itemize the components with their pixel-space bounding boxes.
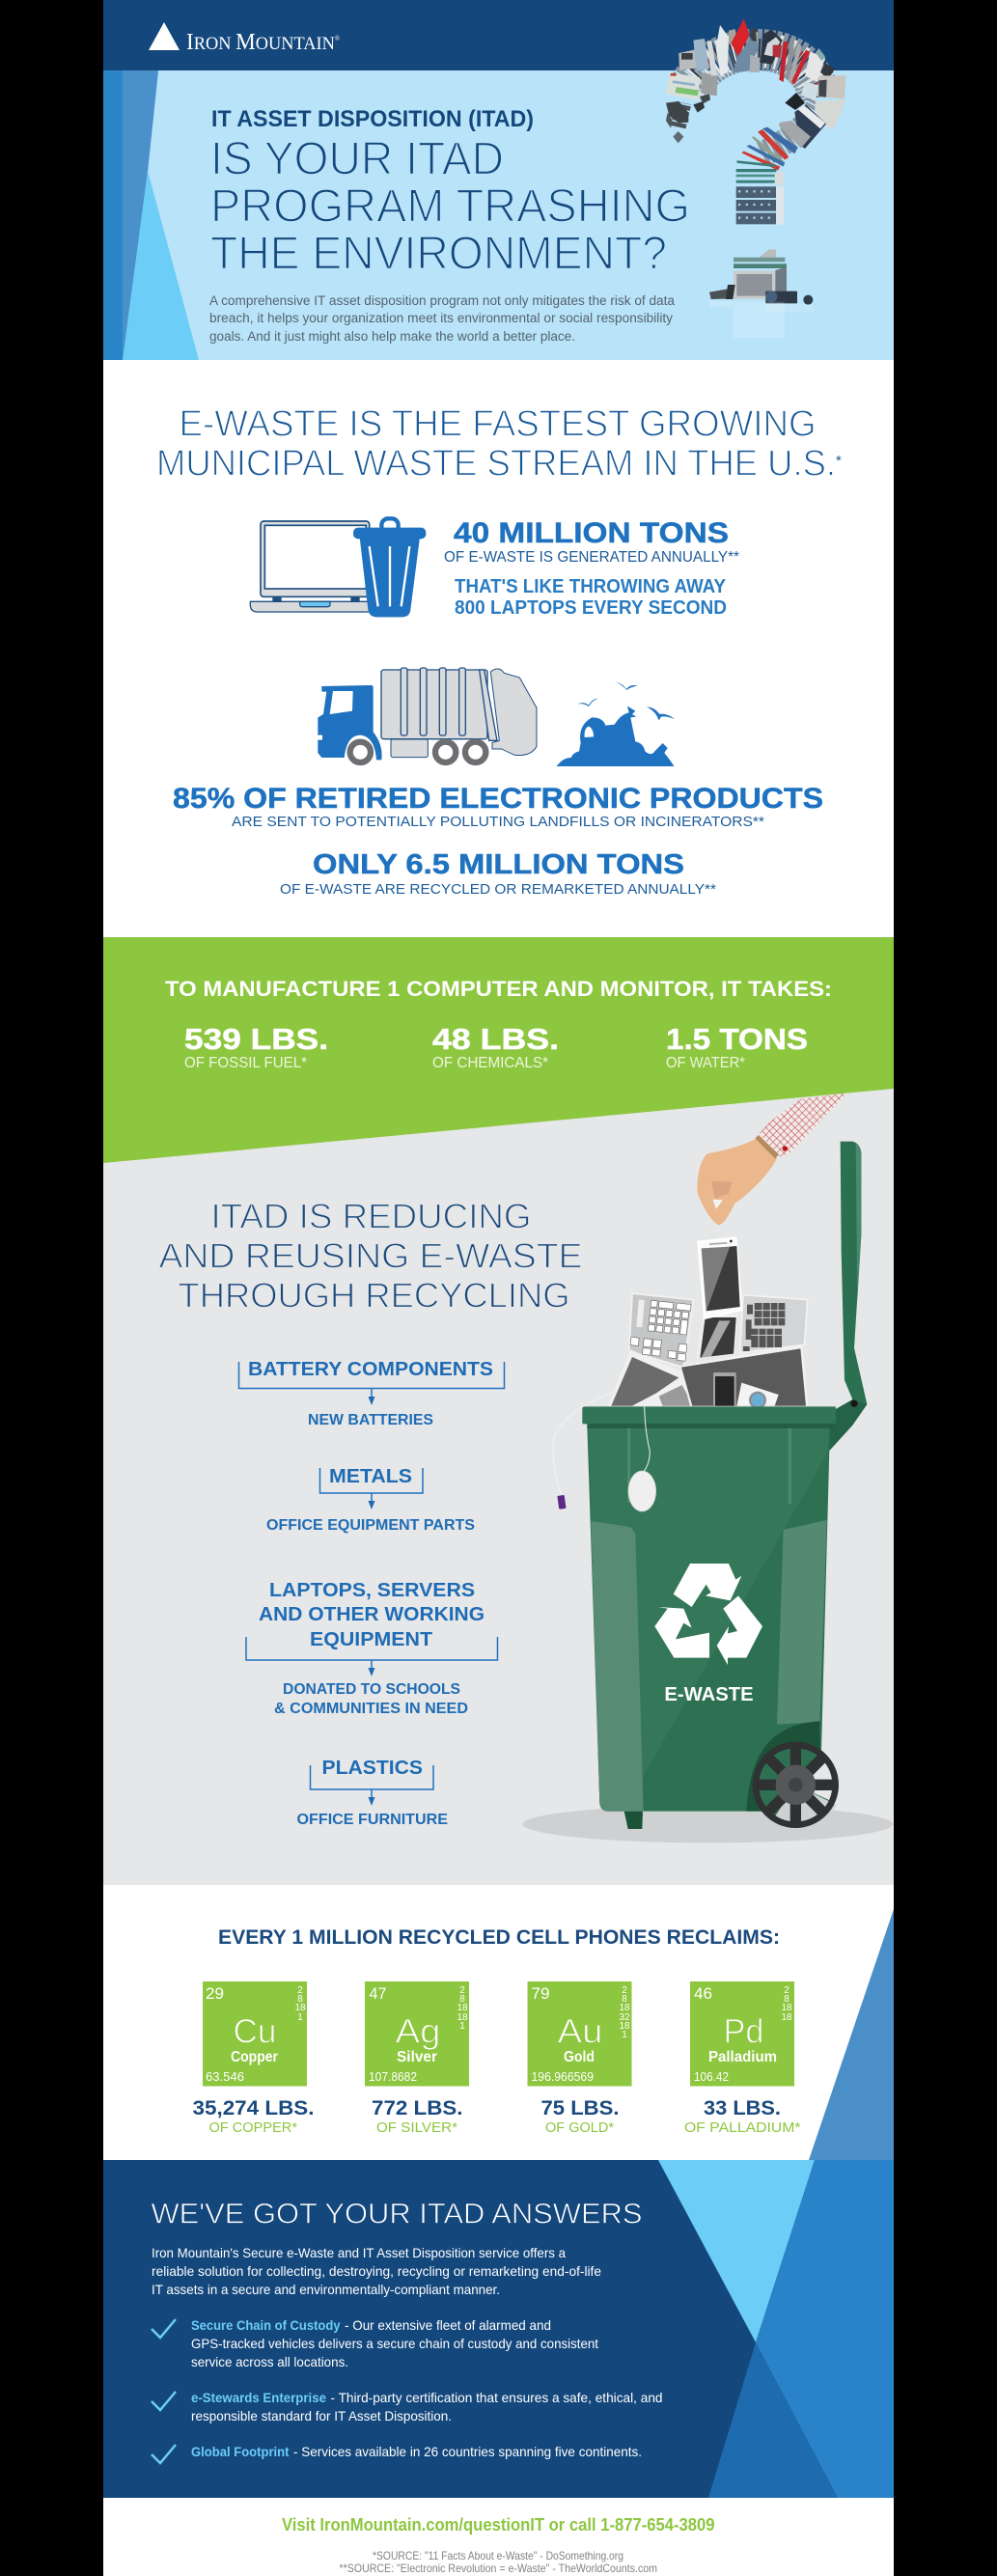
- sources: *SOURCE: "11 Facts About e-Waste" - DoSomething.org: [373, 2549, 623, 2562]
- tile: palladium: 18: [781, 2012, 792, 2023]
- e-waste heading: MUNICIPAL WASTE STREAM IN THE U.S.: [156, 444, 836, 485]
- tile: gold: Au: [558, 2013, 602, 2050]
- heading: ITAD is reducing: THROUGH RECYCLING: [178, 1276, 569, 1315]
- stat: gold: 75 LBS.: [540, 2097, 620, 2119]
- icon: tablet behind phone: [697, 1315, 737, 1358]
- panel: ITAD answers: [103, 2160, 894, 2498]
- panel: e-waste statistics: [103, 360, 894, 937]
- tile: silver: 8: [459, 1994, 465, 2005]
- callout: 800 laptops every second: [455, 576, 727, 619]
- stat: copper: OF COPPER*: [208, 2119, 297, 2136]
- stat: palladium: [684, 2097, 801, 2136]
- recycling symbol: [654, 1564, 762, 1665]
- tile: palladium: 2: [784, 1985, 789, 1996]
- tile: copper: 29: [206, 1984, 224, 2003]
- answers intro paragraph: Iron Mountain's Secure e-Waste and IT Asset Disposition service offers a: [152, 2245, 566, 2260]
- tile: silver: 18: [457, 2003, 468, 2013]
- stat: 40 million tons: OF E-WASTE IS GENERATED ANNUALLY**: [444, 549, 739, 566]
- stat: silver: OF SILVER*: [376, 2119, 457, 2136]
- hero eyebrow heading: IT ASSET DISPOSITION (ITAD): [211, 106, 534, 132]
- flow: battery components: NEW BATTERIES: [308, 1412, 433, 1428]
- illustration: hand and discarded devices: [608, 1094, 846, 1409]
- stat: water: [666, 1022, 808, 1071]
- bullet: secure chain of custody: GPS-tracked vehicles delivers a secure chain of custody and consistent: [191, 2336, 598, 2351]
- answers heading: WE'VE GOT YOUR ITAD ANSWERS: [151, 2199, 643, 2230]
- tile: palladium: 8: [784, 1994, 789, 2005]
- bin lid and hinge: [829, 1142, 867, 1451]
- stat: copper: 35,274 LBS.: [193, 2097, 315, 2119]
- hero paragraph: goals. And it just might also help make the world a better place.: [209, 329, 575, 344]
- heading: ITAD is reducing: ITAD IS REDUCING: [210, 1197, 531, 1235]
- tile: gold: 79: [531, 1984, 550, 2003]
- panel: recycled phones: [103, 1885, 894, 2160]
- tile: palladium: 18: [781, 2003, 792, 2013]
- flow: battery components: BATTERY COMPONENTS: [248, 1359, 493, 1380]
- tile: silver: Ag: [396, 2013, 440, 2050]
- call to action: Visit IronMountain.com/questionIT or call 1-877-654-3809: [282, 2515, 714, 2534]
- bullet: secure chain of custody: - Our extensive fleet of alarmed and: [345, 2317, 551, 2333]
- bullet: e-Stewards Enterprise: responsible standard for IT Asset Disposition.: [191, 2408, 452, 2424]
- stat: silver: 772 LBS.: [372, 2097, 463, 2119]
- icon: check 1: [152, 2319, 176, 2338]
- stat: fossil fuel: OF FOSSIL FUEL*: [184, 1055, 307, 1071]
- stat: fossil fuel: 539 LBS.: [184, 1022, 328, 1056]
- stat: 85% of retired electronic products: 85% OF RETIRED ELECTRONIC PRODUCTS: [173, 783, 823, 815]
- stat: chemicals: [432, 1022, 559, 1071]
- tile: gold: 32: [619, 2012, 630, 2023]
- panel: gray recycling background: [103, 1062, 894, 1885]
- flow: laptops and servers: [246, 1580, 498, 1717]
- tile: palladium: [690, 1981, 794, 2087]
- flow: plastics: [297, 1758, 448, 1828]
- wheel: [756, 1745, 844, 1828]
- icon: laptop: [250, 521, 370, 612]
- stat: chemicals: 48 LBS.: [432, 1022, 559, 1056]
- manufacture heading: TO MANUFACTURE 1 COMPUTER AND MONITOR, IT TAKES:: [165, 977, 832, 1001]
- panel: footer: [103, 2498, 894, 2576]
- tile: copper: 2: [297, 1985, 303, 1996]
- icon: hand: [697, 1135, 788, 1225]
- tile: copper: 63.546: [206, 2069, 244, 2084]
- flow: laptops and servers: & COMMUNITIES IN NEED: [274, 1701, 468, 1717]
- tile: copper: [203, 1981, 307, 2087]
- stat: palladium: 33 LBS.: [704, 2097, 781, 2119]
- stat: only 6.5 million tons: [280, 849, 716, 898]
- logo: Iron Mountain: [149, 22, 341, 55]
- tile: copper: Cu: [234, 2013, 276, 2050]
- hero paragraph: A comprehensive IT asset disposition program not only mitigates the risk of data: [209, 293, 675, 308]
- icon: landfill with birds: [557, 682, 675, 766]
- tile: gold: 18: [619, 2021, 630, 2032]
- icon: phone: [698, 1237, 741, 1318]
- bullet: secure chain of custody: Secure Chain of Custody: [191, 2317, 341, 2333]
- stat: silver: [372, 2097, 463, 2136]
- hero title: THE ENVIRONMENT?: [210, 228, 667, 280]
- stat: water: 1.5 TONS: [666, 1022, 808, 1056]
- icon: e-waste bin: [523, 1142, 893, 1842]
- answers intro paragraph: IT assets in a secure and environmentally-compliant manner.: [152, 2282, 500, 2297]
- logo: Iron Mountain: ®: [335, 35, 341, 42]
- sources: **SOURCE: "Electronic Revolution = e-Waste" - TheWorldCounts.com: [340, 2562, 657, 2575]
- stat: only 6.5 million tons: OF E-WASTE ARE RECYCLED OR REMARKETED ANNUALLY**: [280, 881, 716, 898]
- icon: front tablets and camera: [608, 1344, 808, 1409]
- tile: silver: Silver: [397, 2049, 437, 2065]
- heading: ITAD is reducing: AND REUSING E-WASTE: [158, 1235, 583, 1276]
- answers intro paragraph: reliable solution for collecting, destroying, recycling or remarketing end-of-life: [152, 2263, 601, 2279]
- stat: 40 million tons: [444, 517, 739, 566]
- tile: palladium: 46: [694, 1984, 712, 2003]
- bullet: e-Stewards Enterprise: - Third-party certification that ensures a safe, ethical, and: [330, 2390, 662, 2405]
- tile: palladium: Pd: [724, 2013, 764, 2050]
- hero paragraph: [209, 293, 675, 344]
- hero title: IS YOUR ITAD: [210, 133, 504, 185]
- stat: chemicals: OF CHEMICALS*: [432, 1055, 548, 1071]
- stat: gold: [540, 2097, 620, 2136]
- stat: water: OF WATER*: [666, 1055, 745, 1071]
- panel: manufacture resources: [103, 937, 894, 1163]
- stat: 85% of retired electronic products: ARE SENT TO POTENTIALLY POLLUTING LANDFILLS OR INCINERATORS**: [232, 814, 764, 830]
- answers intro paragraph: [152, 2245, 601, 2297]
- tile: copper: 18: [294, 2003, 306, 2013]
- tile: copper: Copper: [231, 2049, 278, 2065]
- icon: shirt sleeve: [760, 1094, 846, 1156]
- tile: silver: 107.8682: [369, 2069, 417, 2084]
- flow: metals: [266, 1466, 475, 1534]
- tile: gold: 2: [622, 1985, 627, 1996]
- tile: copper: 1: [297, 2012, 303, 2023]
- flow: laptops and servers: EQUIPMENT: [310, 1629, 432, 1650]
- icon: keyboard right: [740, 1295, 808, 1353]
- hero paragraph: breach, it helps your organization meet its environmental or social responsibility: [209, 311, 673, 325]
- bullet: secure chain of custody: [191, 2317, 598, 2369]
- icon: question mark of IT hardware: [666, 18, 846, 338]
- sources: [340, 2549, 657, 2575]
- flow: plastics: OFFICE FURNITURE: [297, 1812, 448, 1828]
- recycled phones heading: EVERY 1 MILLION RECYCLED CELL PHONES RECLAIMS:: [218, 1926, 780, 1949]
- tile: palladium: Palladium: [708, 2049, 777, 2065]
- mouse and cable: [553, 1392, 656, 1511]
- icon: keyboard left: [629, 1293, 693, 1368]
- tile: gold: 196.966569: [531, 2069, 594, 2084]
- icon: trash can: [353, 518, 426, 617]
- tile: palladium: 106.42: [694, 2069, 729, 2084]
- flow: metals: METALS: [329, 1466, 412, 1487]
- e-waste heading: *: [836, 453, 842, 469]
- flow: plastics: PLASTICS: [322, 1758, 423, 1779]
- icon: check 2: [152, 2392, 176, 2410]
- bullet: secure chain of custody: service across all locations.: [191, 2354, 348, 2369]
- tile: gold: 1: [622, 2030, 627, 2040]
- stat: gold: OF GOLD*: [545, 2119, 614, 2136]
- e-waste heading: E-WASTE IS THE FASTEST GROWING: [180, 403, 817, 444]
- tile: gold: 18: [619, 2003, 630, 2013]
- callout: 800 laptops every second: THAT'S LIKE THROWING AWAY: [455, 576, 727, 597]
- bin label: E-WASTE: [664, 1684, 754, 1705]
- hero title: [210, 133, 690, 280]
- tile: gold: Gold: [564, 2049, 595, 2065]
- flow: laptops and servers: AND OTHER WORKING: [259, 1604, 485, 1625]
- icon: check 3: [152, 2445, 176, 2463]
- tile: copper: 8: [297, 1994, 303, 2005]
- bullet: e-Stewards Enterprise: e-Stewards Enterprise: [191, 2390, 326, 2405]
- icon: garbage truck: [318, 668, 537, 762]
- stat: fossil fuel: [184, 1022, 328, 1071]
- bullet: e-Stewards Enterprise: [191, 2390, 662, 2424]
- e-waste heading: [156, 403, 842, 485]
- flow: battery components: [239, 1359, 504, 1428]
- tile: silver: 1: [459, 2021, 465, 2032]
- logo: Iron Mountain: IRON MOUNTAIN: [186, 30, 338, 55]
- tile: silver: 47: [369, 1984, 386, 2003]
- tile: gold: 8: [622, 1994, 627, 2005]
- flow: laptops and servers: DONATED TO SCHOOLS: [283, 1681, 460, 1698]
- tile: silver: [365, 1981, 469, 2087]
- stat: 40 million tons: 40 MILLION TONS: [454, 517, 729, 549]
- bullet: global footprint: - Services available in 26 countries spanning five continents.: [293, 2444, 642, 2459]
- bin shadow: [523, 1806, 893, 1842]
- stat: palladium: OF PALLADIUM*: [684, 2119, 801, 2136]
- callout: 800 laptops every second: 800 LAPTOPS EVERY SECOND: [455, 597, 727, 619]
- stat: copper: [193, 2097, 315, 2136]
- stat: 85% of retired electronic products: [173, 783, 823, 830]
- tile: gold: [527, 1981, 631, 2087]
- tile: silver: 18: [457, 2012, 468, 2023]
- flow: metals: OFFICE EQUIPMENT PARTS: [266, 1517, 475, 1534]
- heading: ITAD is reducing: [158, 1197, 583, 1315]
- flow: laptops and servers: LAPTOPS, SERVERS: [269, 1580, 475, 1601]
- tile: silver: 2: [459, 1985, 465, 1996]
- hero title: PROGRAM TRASHING: [210, 181, 690, 232]
- bullet: global footprint: Global Footprint: [191, 2444, 290, 2459]
- stat: only 6.5 million tons: ONLY 6.5 MILLION TONS: [313, 849, 684, 880]
- panel: hero header: [103, 0, 894, 360]
